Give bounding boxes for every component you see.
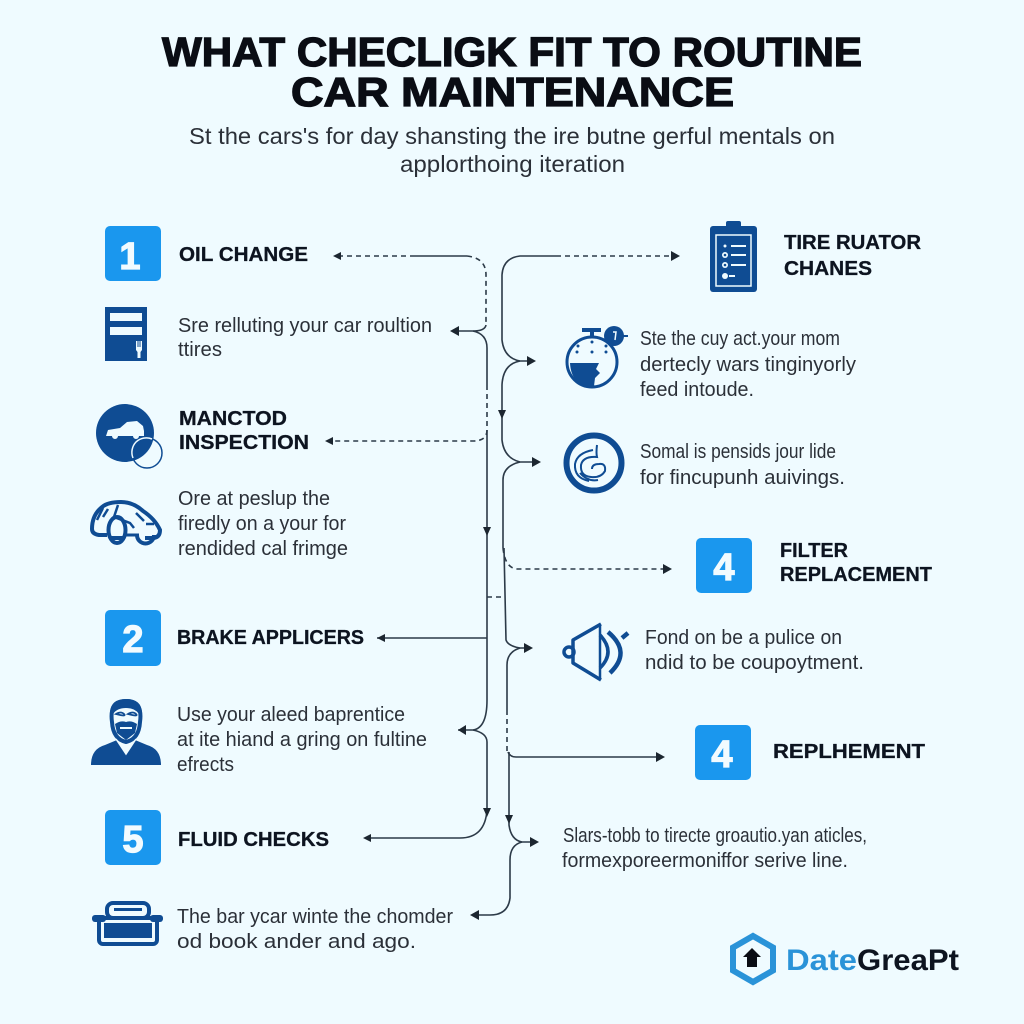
text: brake body: at ite hiand a gring on fultine xyxy=(177,728,427,751)
text: fluid body: The bar ycar winte the chomder xyxy=(177,905,453,928)
text: brake body: efrects xyxy=(177,753,234,776)
icon: stopwatch xyxy=(567,326,628,387)
step 1 badge: 1 xyxy=(119,236,141,278)
step 5 badge xyxy=(105,810,161,865)
text: tire body one xyxy=(640,327,857,401)
text: brake body xyxy=(177,703,427,776)
text: fluid body xyxy=(177,905,453,953)
text: replacement body: Slars-tobb to tirecte groautio.yan aticles, xyxy=(563,824,867,847)
heading: fluid checks: FLUID CHECKS xyxy=(178,828,329,851)
step 2 badge xyxy=(105,610,161,666)
heading: filter replacement xyxy=(780,539,932,586)
title: WHAT CHECLIGK FIT TO ROUTINE xyxy=(162,29,862,75)
step 4 badge: replacement: 4 xyxy=(711,734,733,776)
icon: swirl in ring xyxy=(566,436,622,490)
heading: brake applicers: BRAKE APPLICERS xyxy=(177,626,364,649)
subtitle xyxy=(189,123,835,177)
subtitle: applorthoing iteration xyxy=(400,151,625,177)
step 4 badge: filter xyxy=(696,538,752,593)
text: filter body xyxy=(645,626,864,674)
logo: GreaPt xyxy=(857,944,959,977)
heading: replhement: REPLHEMENT xyxy=(773,740,926,763)
text: oil change body: ttires xyxy=(178,338,222,361)
text: oil change body: Sre relluting your car roultion xyxy=(178,314,432,337)
text: filter body: Fond on be a pulice on xyxy=(645,626,842,649)
text: inspection body: firedly on a your for xyxy=(178,512,346,535)
text: inspection body: Ore at peslup the xyxy=(178,487,330,510)
text: tire body two: for fincupunh auivings. xyxy=(640,466,845,489)
heading: tire rotator changes xyxy=(784,231,921,280)
step 4 badge: filter: 4 xyxy=(713,547,735,589)
logo: Date xyxy=(786,944,857,977)
connector lines: left trunk xyxy=(325,252,505,842)
text: inspection body: rendided cal frimge xyxy=(178,537,348,560)
text: fluid body: od book ander and ago. xyxy=(177,930,416,953)
step 4 badge: replacement xyxy=(695,725,751,780)
text: tire body two: Somal is pensids jour lide xyxy=(640,440,836,463)
heading: filter replacement: REPLACEMENT xyxy=(780,563,932,586)
text: tire body one: Ste the cuy act.your mom xyxy=(640,327,840,350)
subtitle: St the cars's for day shansting the ire butne gerful mentals on xyxy=(189,123,835,149)
step 1 badge xyxy=(105,226,161,281)
step 5 badge: 5 xyxy=(122,819,144,861)
text: tire body one: dertecly wars tinginyorly xyxy=(640,353,857,376)
heading: oil change: OIL CHANGE xyxy=(179,243,308,266)
heading: filter replacement: FILTER xyxy=(780,539,848,562)
icon: document xyxy=(105,307,147,361)
icon: person xyxy=(91,699,161,765)
icon: car in circle xyxy=(96,404,162,468)
text: inspection body xyxy=(178,487,348,560)
heading: manctod inspection: INSPECTION xyxy=(179,431,309,454)
logo xyxy=(733,936,959,982)
icon: fluid container xyxy=(92,903,163,944)
heading: tire rotator changes: CHANES xyxy=(784,257,872,280)
text: oil change body xyxy=(178,314,432,361)
icon: speaker xyxy=(564,624,628,680)
text: filter body: ndid to be coupoytment. xyxy=(645,651,864,674)
heading: manctod inspection: MANCTOD xyxy=(179,407,287,430)
heading: tire rotator changes: TIRE RUATOR xyxy=(784,231,921,254)
text: replacement body: formexporeermoniffor serive line. xyxy=(562,849,848,872)
icon: car outline xyxy=(92,502,160,544)
text: brake body: Use your aleed baprentice xyxy=(177,703,405,726)
text: replacement body xyxy=(562,824,867,872)
connector lines: right trunk xyxy=(470,251,680,920)
text: tire body one: feed intoude. xyxy=(640,378,754,401)
text: tire body two xyxy=(640,440,845,489)
icon: clipboard xyxy=(710,221,757,292)
title: CAR MAINTENANCE xyxy=(291,69,734,115)
step 2 badge: 2 xyxy=(122,619,144,661)
title xyxy=(162,29,862,115)
heading: manctod inspection xyxy=(179,407,309,454)
